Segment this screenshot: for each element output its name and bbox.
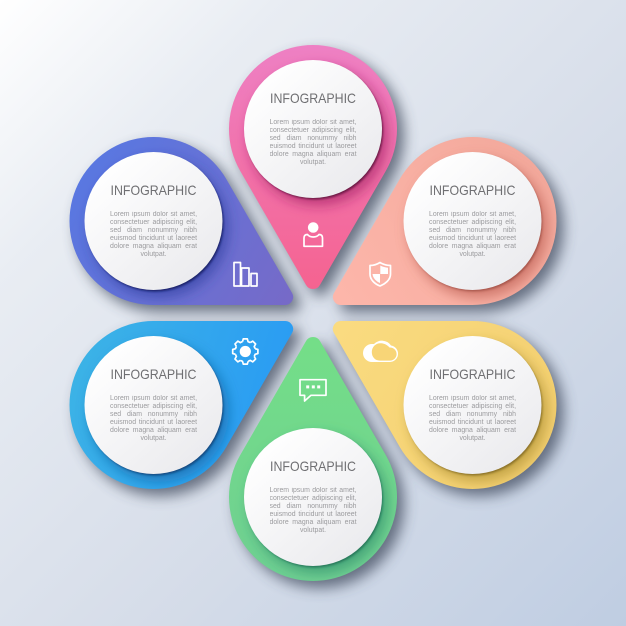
circle — [404, 336, 542, 474]
text block — [270, 119, 358, 169]
icon: speech bubble — [300, 380, 326, 401]
panel: lower left blue pin — [70, 321, 293, 489]
text block: dolore magna aliquam erat — [429, 243, 516, 250]
icon: person — [304, 222, 322, 246]
text block: euismod tincidunt ut laoreet — [429, 235, 516, 242]
circle — [244, 60, 382, 198]
text block: consectetuer adipiscing elit, — [429, 403, 516, 410]
text block: consectetuer adipiscing elit, — [429, 219, 516, 226]
text block: sed diam nonummy nibh — [270, 503, 356, 510]
heading: INFOGRAPHIC — [110, 367, 197, 382]
text block: volutpat. — [140, 251, 167, 258]
text block — [110, 395, 198, 445]
icon: bar chart — [234, 262, 257, 286]
text block: dolore magna aliquam erat — [110, 243, 197, 250]
circle — [84, 336, 222, 474]
text block: sed diam nonummy nibh — [110, 227, 197, 234]
heading: INFOGRAPHIC — [430, 367, 516, 382]
icon: cloud — [363, 341, 398, 362]
text block: sed diam nonummy nibh — [270, 135, 356, 142]
text block: dolore magna aliquam erat — [270, 151, 356, 158]
text block: euismod tincidunt ut laoreet — [110, 235, 197, 242]
text block: consectetuer adipiscing elit, — [270, 127, 356, 134]
text block — [110, 211, 198, 261]
drop shadows — [77, 52, 563, 588]
text block: sed diam nonummy nibh — [429, 411, 516, 418]
text block: consectetuer adipiscing elit, — [110, 403, 197, 410]
text block: euismod tincidunt ut laoreet — [270, 143, 356, 150]
text block: euismod tincidunt ut laoreet — [110, 419, 197, 426]
text block: Lorem ipsum dolor sit amet, — [270, 119, 356, 126]
text block — [429, 395, 517, 445]
circle — [84, 152, 222, 290]
text block: volutpat. — [459, 251, 486, 258]
heading: INFOGRAPHIC — [270, 459, 356, 474]
text block: Lorem ipsum dolor sit amet, — [110, 211, 197, 218]
text block: euismod tincidunt ut laoreet — [429, 419, 516, 426]
panel: top pink pin — [229, 45, 397, 289]
text block: Lorem ipsum dolor sit amet, — [429, 211, 516, 218]
text block: consectetuer adipiscing elit, — [270, 495, 356, 502]
circle — [244, 428, 382, 566]
text block: dolore magna aliquam erat — [429, 427, 516, 434]
text block: volutpat. — [140, 435, 167, 442]
text block: euismod tincidunt ut laoreet — [270, 511, 356, 518]
heading: INFOGRAPHIC — [110, 183, 197, 198]
icon: gear — [233, 339, 258, 364]
panel: lower right yellow pin — [333, 321, 556, 489]
text block: consectetuer adipiscing elit, — [110, 219, 197, 226]
text block: sed diam nonummy nibh — [110, 411, 197, 418]
heading: INFOGRAPHIC — [270, 91, 356, 106]
text block: Lorem ipsum dolor sit amet, — [270, 487, 356, 494]
text block: dolore magna aliquam erat — [110, 427, 197, 434]
text block: volutpat. — [300, 527, 326, 534]
heading: INFOGRAPHIC — [430, 183, 516, 198]
icon: shield — [370, 262, 390, 286]
text block — [429, 211, 517, 261]
text block: Lorem ipsum dolor sit amet, — [429, 395, 516, 402]
panel: upper left indigo pin — [70, 137, 293, 305]
circle — [404, 152, 542, 290]
text block — [270, 487, 358, 537]
text block: dolore magna aliquam erat — [270, 519, 356, 526]
text block: Lorem ipsum dolor sit amet, — [110, 395, 197, 402]
panel: upper right salmon pin — [333, 137, 556, 305]
text block: sed diam nonummy nibh — [429, 227, 516, 234]
text block: volutpat. — [300, 159, 326, 166]
text block: volutpat. — [459, 435, 486, 442]
panel: bottom green pin — [229, 337, 397, 581]
